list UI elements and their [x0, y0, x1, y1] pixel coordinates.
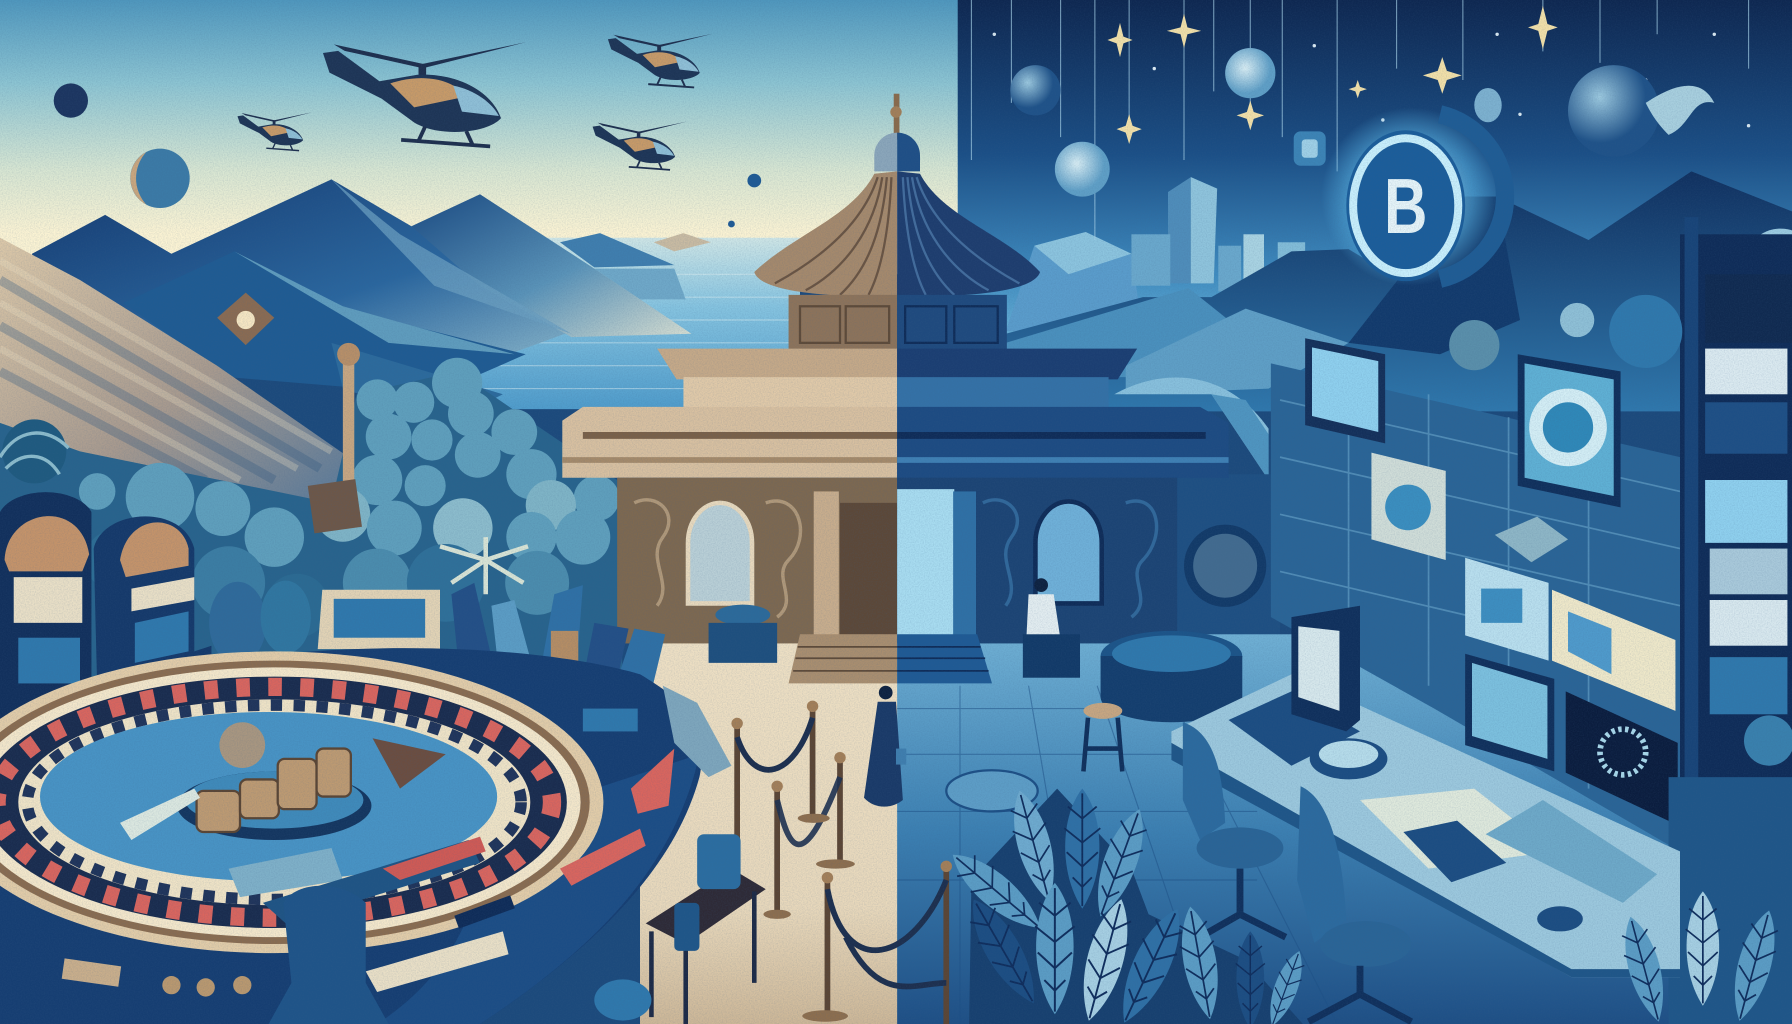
roof left half [754, 171, 897, 297]
floating spheres in the left sky [54, 83, 761, 249]
right column [953, 491, 976, 635]
bar stool [1083, 703, 1122, 771]
helicopters [237, 34, 713, 170]
floating orbs near cabinet [1449, 295, 1682, 370]
foliage mass behind right foreground plants [969, 789, 1303, 1024]
upper entablature right [897, 349, 1137, 379]
table markings on felt [120, 722, 446, 897]
desk kiosk terminal [1291, 606, 1360, 731]
roof right half [897, 171, 1040, 297]
planets on the right [1010, 48, 1714, 197]
middle wall left [683, 377, 897, 432]
roof ribs [775, 177, 1019, 295]
left garden trees [0, 358, 623, 686]
lower wall left [617, 478, 897, 643]
right shelving cabinet [1669, 217, 1792, 1024]
left column [814, 491, 839, 635]
starry sky strands and stars [971, 0, 1750, 240]
left sky background [0, 0, 960, 274]
right tropical leaves [1114, 378, 1349, 646]
arched window left [688, 503, 752, 603]
roulette table base [0, 648, 702, 1024]
entrance stairs left [789, 634, 897, 683]
drum right [897, 295, 1007, 350]
betting layout on table [263, 749, 674, 992]
seated figure right [1023, 578, 1080, 678]
lower roof right [897, 407, 1229, 478]
rope barrier posts [731, 701, 952, 1024]
left mountain range [32, 179, 691, 423]
city skyline [1131, 177, 1305, 293]
emblem on right floor [946, 770, 1038, 811]
slot machines [0, 492, 211, 743]
doorway right light [897, 489, 954, 635]
right floor [897, 634, 1792, 1024]
office chairs [1183, 722, 1411, 1022]
roulette wheel track [0, 651, 603, 953]
small palm beside roulette table [663, 686, 731, 777]
row of lounge seats [209, 581, 665, 691]
drum left [789, 295, 897, 350]
round game table right [1101, 631, 1242, 722]
right foreground plants [942, 786, 1786, 1024]
right distant hills [1006, 232, 1143, 331]
glowing bitcoin coin: B [1384, 164, 1427, 250]
table chips and buttons [62, 709, 638, 997]
distant islands [560, 233, 711, 299]
tan foreground hills [0, 238, 349, 509]
small side table with cans [594, 834, 766, 1024]
large sphere at right edge [1744, 229, 1792, 302]
lantern beacon and tower [217, 293, 362, 533]
middle wall right [897, 377, 1109, 432]
doorway left [840, 503, 897, 634]
right night sky background [958, 0, 1792, 343]
pavilion table left [709, 605, 777, 663]
arched window right [1035, 501, 1102, 603]
right wall with grid [1271, 363, 1680, 851]
lower wall right [897, 478, 1177, 643]
device on the wall [1495, 517, 1568, 562]
entrance stairs right [897, 634, 992, 683]
wall ornament [634, 500, 1157, 617]
foreground chair at table [269, 886, 389, 1024]
upper entablature left [657, 349, 897, 379]
glowing bitcoin coin [1321, 107, 1505, 286]
central chip dish and chips [177, 749, 371, 840]
left floor [640, 634, 898, 1024]
small game display on stand [318, 590, 440, 649]
drum carving [800, 306, 998, 343]
standing woman in dark dress [864, 686, 906, 807]
lower roof left [562, 407, 897, 478]
workstation desk [1171, 674, 1680, 977]
distant sea [423, 238, 800, 409]
right mountain range [1006, 171, 1792, 411]
pavilion finial and dome [874, 94, 920, 171]
central pavilion [562, 94, 1229, 683]
wall monitors [1305, 338, 1678, 825]
